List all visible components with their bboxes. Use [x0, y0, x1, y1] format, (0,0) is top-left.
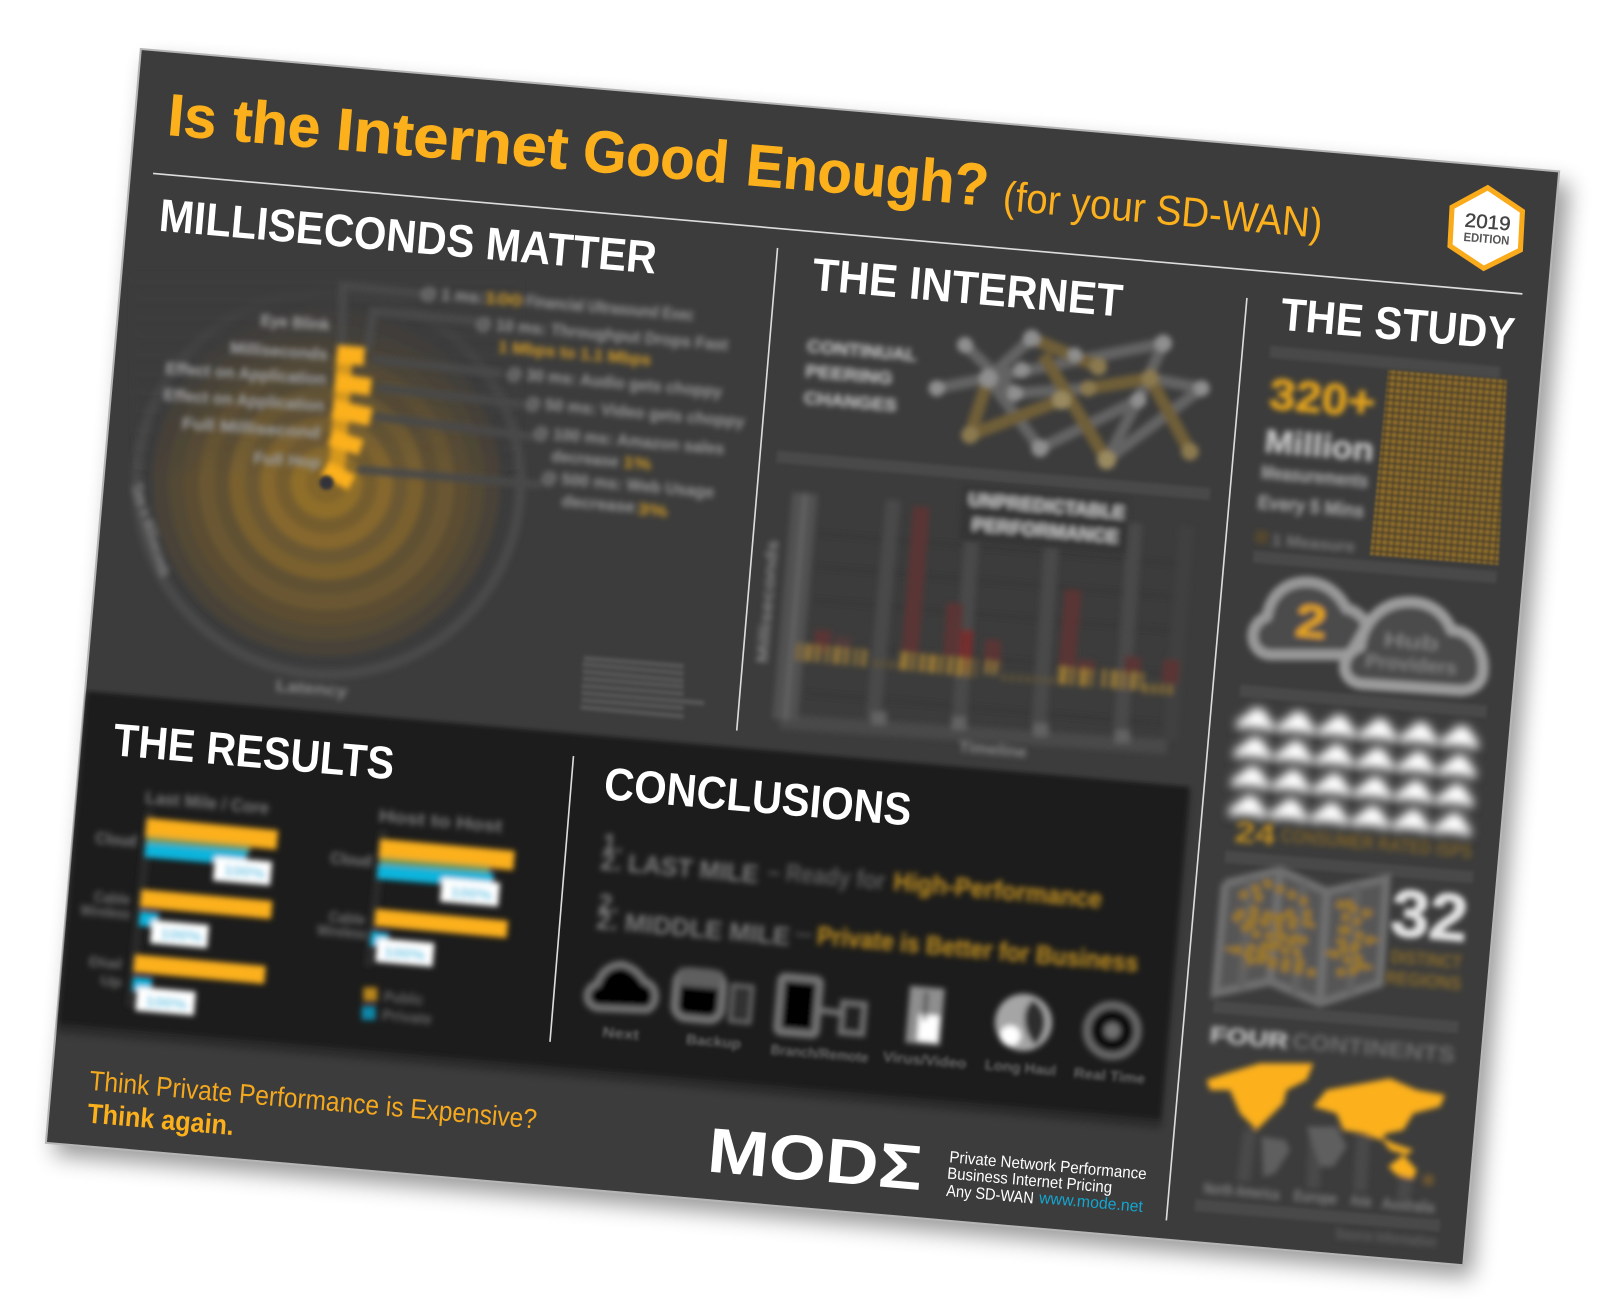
heading: conclusions: CONCLUSIONS [602, 757, 914, 836]
study divider bands [1240, 352, 1500, 712]
radar outer ring [137, 291, 520, 674]
map labels: Australia [1381, 1195, 1435, 1217]
results chart: last mile: 100% [145, 994, 188, 1014]
results axis lines [130, 810, 383, 1007]
radar right labels: 1% [622, 453, 653, 474]
radar axis labels [127, 481, 348, 701]
conclusion 2: Private is Better for Business [816, 922, 1139, 978]
badge: 2019 edition: EDITION [1463, 230, 1510, 248]
radar right labels: 100 [483, 289, 524, 310]
subtitle: (for your SD-WAN) [1001, 172, 1325, 247]
map grey continents [1262, 1127, 1347, 1177]
footer value statements [946, 1148, 1147, 1216]
panel: the internet [754, 330, 1210, 762]
icon: database [673, 967, 753, 1023]
footer value statements: Any SD-WAN [946, 1182, 1035, 1207]
icon: cloud [587, 964, 656, 1010]
stat: 32 internet routes: DISTINCT [1390, 946, 1463, 973]
results chart: last mile: Cloud [95, 828, 138, 851]
chart axis titles [754, 539, 1028, 762]
chart axis titles: Milliseconds [754, 539, 782, 664]
map labels: Source Information [1335, 1225, 1437, 1251]
dark band: results and conclusions [56, 692, 1191, 1128]
radar left labels [163, 312, 331, 472]
map leader bands [1243, 1130, 1407, 1200]
panel: conclusions text [595, 829, 1139, 978]
leader lines [342, 286, 541, 485]
stat: 24 consumer locations [1233, 816, 1473, 863]
title: Is the [165, 81, 323, 161]
chart y axis [785, 493, 805, 720]
panel: the study, cloud grid [1227, 704, 1482, 842]
conclusion 1 [599, 829, 1103, 914]
heading: the study: THE STUDY [1279, 288, 1517, 360]
badge: 2019 edition: 2019 [1464, 210, 1511, 235]
map labels: Asia [1350, 1192, 1372, 1211]
icon: folded map [1215, 870, 1387, 1003]
conclusion 1: – Ready for [767, 858, 886, 896]
radar left labels: Full Millisecond [181, 415, 321, 442]
map labels: North America [1203, 1180, 1280, 1204]
icon: hub clouds: Providers [1365, 650, 1458, 679]
icon: hub clouds: 2 [1293, 594, 1329, 649]
column dividers [550, 248, 1247, 1220]
results chart: last mile [80, 787, 277, 1016]
panel: the results [80, 787, 514, 1028]
internet divider band [777, 457, 1210, 494]
radar right labels: @ 500 ms: Web Usage [540, 469, 715, 502]
footer tagline: Think Private Performance is Expensive? [88, 1065, 538, 1135]
chart title: UNPREDICTABLE [968, 489, 1126, 523]
results chart: last mile: Last Mile / Core [145, 787, 270, 818]
stat: 320+ million measurements: 1 Measure [1271, 532, 1356, 556]
stat: 320+ million measurements: Million [1263, 423, 1375, 468]
four continents heading [1209, 1022, 1456, 1067]
panel: milliseconds radar chart [133, 276, 541, 674]
map labels: Europe [1293, 1188, 1338, 1208]
study divider bands lower [1195, 857, 1473, 1226]
conclusion 1: High-Performance [892, 868, 1103, 914]
four continents heading: FOUR [1209, 1022, 1289, 1053]
radar right labels: decrease [551, 447, 619, 471]
heading: milliseconds matter: MILLISECONDS MATTER [157, 189, 659, 284]
conclusion icon labels: Real Time [1073, 1066, 1146, 1088]
conclusion icon labels: Virus/Video [882, 1049, 967, 1072]
footer tagline: Think again. [86, 1098, 235, 1141]
logo: MODE: MODΣ [705, 1116, 925, 1204]
title: Enough? [744, 131, 992, 219]
conclusion icon labels [602, 1025, 1146, 1088]
icon: hub clouds [1253, 582, 1483, 691]
radar axis labels: Time in Milliseconds [127, 481, 174, 579]
chart tick boxes [872, 712, 1130, 743]
conclusion 1: 2. LAST MILE [599, 847, 759, 889]
results chart: last mile: Up [100, 972, 123, 990]
results chart: host to host: Wireless [316, 922, 368, 943]
conclusion icons [587, 964, 1138, 1056]
dot matrix: measurements [1370, 370, 1507, 565]
results chart: last mile: Cable [93, 889, 131, 909]
results chart: last mile: 100% [223, 863, 266, 883]
title: Internet [334, 95, 571, 182]
world map [1207, 1063, 1445, 1200]
radar right labels: 3% [636, 500, 669, 521]
results chart: host to host: Cable [328, 909, 366, 929]
radar right labels: decrease [561, 492, 636, 516]
results legend [362, 987, 433, 1028]
internet intro text: PEERING [805, 361, 893, 388]
icon: hub clouds: Hub [1383, 629, 1440, 656]
stat: 320+ million measurements: Measurements [1260, 462, 1369, 493]
radar right labels: @ 10 ms: Throughput Drops Fast [475, 315, 729, 354]
radar left labels: Effect on Application [165, 360, 327, 389]
chart axis titles: Timeline [958, 739, 1028, 762]
results chart: host to host: 100% [383, 945, 426, 964]
chart latency series [797, 652, 1175, 690]
radar left labels: Effect on Application [163, 386, 325, 415]
four continents heading: CONTINENTS [1291, 1028, 1456, 1067]
results chart: host to host: Host to Host [378, 806, 503, 836]
chart red spikes [822, 507, 1172, 683]
footer value statements: Business Internet Pricing [947, 1165, 1113, 1197]
heading: the internet: THE INTERNET [810, 248, 1125, 327]
radar concentric rings [133, 276, 520, 656]
heading: the results: THE RESULTS [111, 713, 396, 789]
conclusion 1: 1. [602, 829, 624, 859]
conclusion icon labels: Backup [685, 1032, 742, 1053]
results legend: Private [381, 1007, 433, 1028]
results chart: last mile: 100% [160, 926, 203, 946]
stat: 24 consumer locations: CONSUMER RATED ISPS [1280, 826, 1473, 863]
conclusion 2: 2. [597, 889, 620, 919]
title rule [153, 173, 1522, 294]
icon: ring [1087, 1005, 1138, 1056]
radar right labels: @ 30 ms: Audio gets choppy [506, 365, 723, 401]
map orange continents [1207, 1063, 1445, 1178]
panel: the study, upper [1240, 352, 1507, 712]
latency ladder [321, 345, 373, 490]
radar right labels: 1 Mbps to 1.1 Mbps [498, 338, 652, 369]
chart title: PERFORMANCE [971, 514, 1119, 547]
radar center [319, 476, 334, 490]
title: Good [581, 117, 732, 196]
conclusion icon labels: Long Haul [984, 1057, 1057, 1080]
radar right labels [420, 284, 745, 521]
stat: 320+ million measurements [1255, 370, 1377, 556]
icon: server [905, 986, 945, 1046]
results chart: host to host [316, 806, 514, 967]
badge: 2019 edition [1450, 188, 1522, 268]
internet intro text [803, 336, 918, 415]
icon: globe [995, 994, 1052, 1051]
radar right labels: @ 1 ms: [420, 284, 485, 307]
conclusion 2: – [793, 919, 814, 948]
radar right labels: Financial Ultrasound Exec [525, 292, 694, 325]
chart grid [805, 533, 1190, 725]
radar right labels: @ 50 ms: Video gets choppy [524, 394, 745, 431]
footer value statements: Private Network Performance [949, 1148, 1147, 1183]
latency chart [780, 493, 1190, 747]
results chart: last mile: Wireless [80, 902, 131, 923]
results chart: host to host: 100% [450, 885, 493, 904]
stat: 32 internet routes: 32 [1388, 876, 1471, 957]
title [165, 81, 992, 219]
radar axis labels: Latency [275, 677, 348, 701]
stat: 32 internet routes: REGIONS [1385, 966, 1462, 994]
internet intro text: CHANGES [803, 387, 898, 415]
conclusion 2: 2. MIDDLE MILE [595, 907, 791, 951]
chart title [959, 485, 1129, 554]
stat: 320+ million measurements: 320+ [1267, 370, 1377, 427]
conclusion 2 [595, 889, 1139, 978]
panel: the study, lower [1195, 816, 1473, 1251]
radar right labels: @ 100 ms: Amazon sales [532, 424, 725, 458]
radar left labels: Eye Blink [260, 312, 331, 334]
icon: tablet and nodes [777, 977, 865, 1035]
map labels [1203, 1180, 1437, 1251]
conclusion icon labels: Branch/Remote [770, 1042, 869, 1067]
internet intro text: CONTINUAL [806, 336, 918, 365]
conclusion icon labels: Next [602, 1025, 640, 1044]
results chart: host to host: Cloud [330, 848, 373, 871]
results chart: last mile: Dial [88, 953, 123, 972]
source notes block [581, 658, 704, 716]
stat: 24 consumer locations: 24 [1233, 816, 1277, 852]
results legend: Public [383, 989, 425, 1009]
radar left labels: Full Hop [253, 449, 321, 472]
radar left labels: Milliseconds [229, 339, 328, 364]
footer value statements: www.mode.net [1037, 1189, 1144, 1216]
stat: 32 internet routes [1385, 876, 1471, 994]
network diagram [929, 330, 1210, 469]
stat: 320+ million measurements: Every 5 Mins [1257, 492, 1365, 523]
